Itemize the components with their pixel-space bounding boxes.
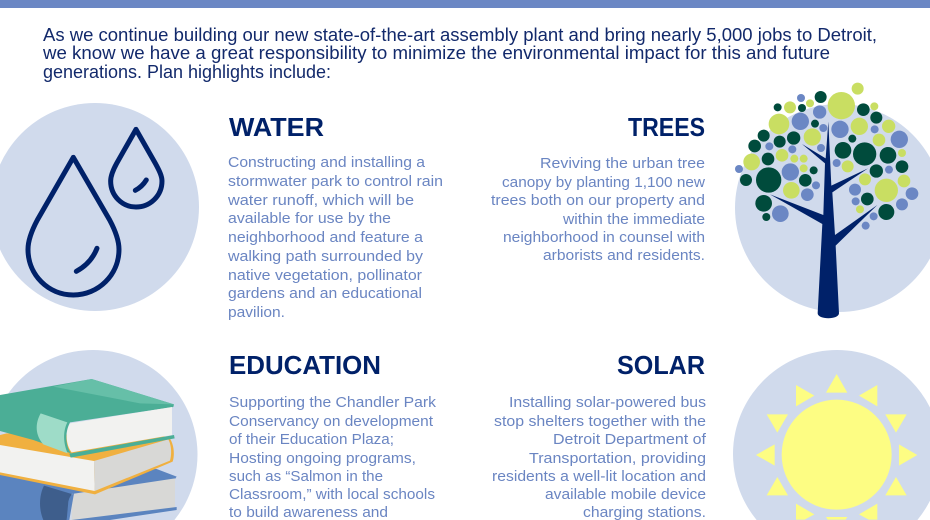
text: education body: Classroom,” with local schools bbox=[229, 487, 435, 503]
intro text bbox=[42, 25, 877, 82]
text: education body: Conservancy on development bbox=[229, 414, 433, 430]
icon: water drops bbox=[0, 103, 199, 311]
icon: books bbox=[0, 350, 197, 520]
panel: solar bbox=[492, 350, 930, 520]
intro text: we know we have a great responsibility to minimize the environmental impact for this and future bbox=[42, 43, 830, 63]
text: water body: neighborhood and feature a bbox=[228, 230, 424, 246]
text: water body: pavilion. bbox=[228, 305, 285, 321]
blue book bbox=[0, 468, 177, 520]
text: water body: walking path surrounded by bbox=[227, 249, 424, 265]
panel: education bbox=[0, 350, 437, 520]
text: education body: Hosting ongoing programs, bbox=[229, 451, 416, 467]
text: trees body: canopy by planting 1,100 new bbox=[502, 175, 705, 191]
text: water body bbox=[227, 155, 443, 321]
text: trees body: neighborhood in counsel with bbox=[503, 230, 705, 246]
text: solar body: Installing solar-powered bus bbox=[509, 395, 706, 411]
text: solar body: stop shelters together with the bbox=[494, 414, 706, 430]
heading: trees: TREES bbox=[628, 112, 705, 142]
heading: water: WATER bbox=[229, 112, 324, 142]
text: water body: gardens and an educational bbox=[228, 286, 422, 302]
text: trees body: arborists and residents. bbox=[543, 248, 705, 264]
top bar bbox=[0, 0, 930, 8]
panel: water bbox=[0, 103, 443, 321]
text: solar body bbox=[492, 395, 707, 520]
text: solar body: residents a well-lit location and bbox=[492, 469, 706, 485]
text: trees body: Reviving the urban tree bbox=[540, 156, 705, 172]
text: education body: of their Education Plaza; bbox=[229, 432, 394, 448]
icon: tree bbox=[735, 83, 930, 318]
text: water body: native vegetation, pollinator bbox=[228, 268, 422, 284]
intro text: As we continue building our new state-of-the-art assembly plant and bring nearly 5,000 jobs to Detroit, bbox=[43, 25, 877, 45]
text: education body: such as “Salmon in the bbox=[229, 469, 383, 485]
text: water body: available for use by the bbox=[228, 211, 391, 227]
text: solar body: available mobile device bbox=[545, 487, 706, 503]
text: water body: Constructing and installing a bbox=[228, 155, 426, 171]
text: water body: stormwater park to control rain bbox=[228, 174, 443, 190]
text: trees body bbox=[491, 156, 705, 264]
heading: education: EDUCATION bbox=[229, 350, 381, 380]
text: trees body: trees both on our property and bbox=[491, 193, 705, 209]
text: trees body: within the immediate bbox=[562, 212, 705, 228]
text: education body: Supporting the Chandler Park bbox=[229, 395, 437, 411]
green book bbox=[0, 379, 174, 453]
orange book bbox=[0, 433, 174, 494]
text: solar body: Transportation, providing bbox=[529, 451, 706, 467]
text: education body bbox=[229, 395, 437, 520]
intro text: generations. Plan highlights include: bbox=[43, 62, 331, 82]
text: water body: water runoff, which will be bbox=[227, 193, 414, 209]
icon: sun bbox=[733, 350, 930, 520]
heading: solar: SOLAR bbox=[617, 350, 705, 380]
text: solar body: Detroit Department of bbox=[553, 432, 707, 448]
panel: trees bbox=[491, 83, 930, 318]
